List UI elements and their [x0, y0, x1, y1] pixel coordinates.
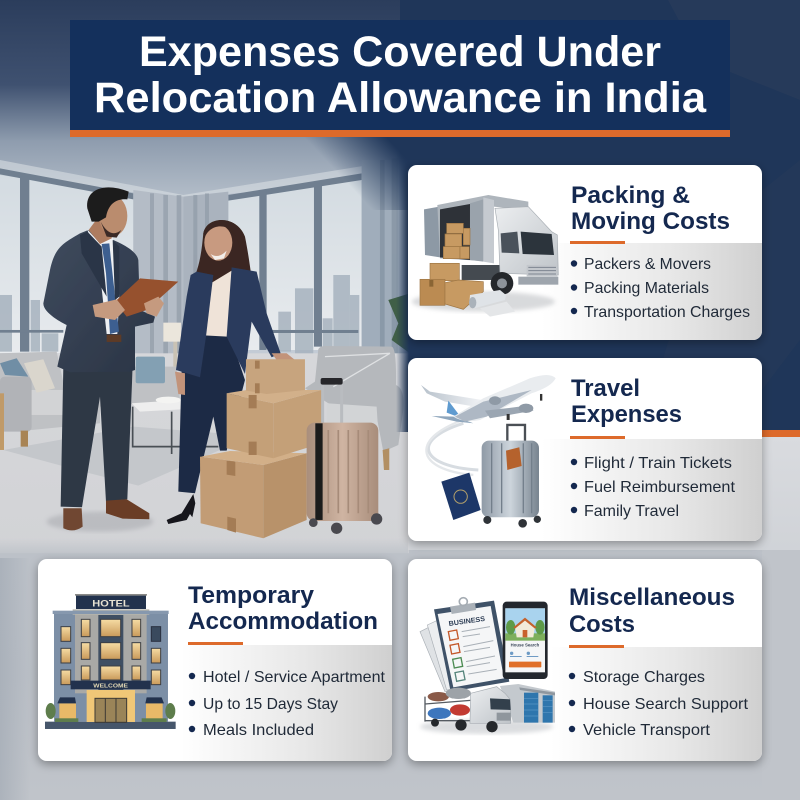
bullet list	[571, 256, 750, 321]
title text	[94, 28, 707, 122]
room interior	[0, 140, 411, 553]
bullet list: Vehicle Transport	[583, 722, 711, 739]
panel: travel expenses	[408, 358, 762, 541]
bullet list: House Search Support	[583, 696, 749, 713]
woman	[167, 220, 295, 524]
icon: moving truck with boxes	[412, 195, 558, 317]
bullet list: Storage Charges	[583, 669, 705, 686]
heading: Moving Costs	[571, 208, 730, 235]
bullet list	[569, 669, 749, 739]
panel: temporary accommodation	[38, 559, 392, 761]
bullet list: Flight / Train Tickets	[584, 455, 732, 472]
accent line	[569, 645, 624, 648]
photo edge blending	[0, 100, 420, 558]
heading	[188, 582, 378, 635]
bullet list: Up to 15 Days Stay	[203, 696, 338, 713]
title text: Relocation Allowance in India	[94, 74, 707, 122]
rose gold suitcase	[307, 378, 382, 534]
man	[43, 187, 178, 532]
accent line	[570, 436, 625, 439]
armchair	[305, 346, 404, 470]
heading	[569, 584, 735, 638]
title text: Expenses Covered Under	[139, 28, 661, 76]
icon: airplane with suitcase and passport	[421, 375, 556, 528]
heading: Expenses	[571, 401, 682, 428]
icon: hotel building: WELCOME	[93, 683, 128, 689]
bullet list	[189, 669, 386, 739]
bullet list: Transportation Charges	[584, 304, 750, 321]
heading	[571, 375, 682, 428]
bullet list: Meals Included	[203, 722, 314, 739]
bullet list: Packers & Movers	[584, 256, 711, 273]
heading: Accommodation	[188, 608, 378, 635]
coffee table	[132, 397, 218, 454]
heading: Miscellaneous	[569, 584, 735, 611]
title banner	[70, 20, 730, 137]
heading: Costs	[569, 611, 635, 638]
bullet list: Family Travel	[584, 503, 679, 520]
icon: clipboard, tablet, car carrier and storage unit: House Search	[511, 642, 540, 647]
stacked moving boxes	[200, 359, 322, 538]
heading: Packing &	[571, 182, 690, 209]
panel: miscellaneous costs	[408, 559, 762, 761]
heading: Temporary	[188, 582, 315, 609]
sofa	[0, 352, 180, 450]
bullet list: Fuel Reimbursement	[584, 479, 736, 496]
bullet list	[571, 455, 736, 520]
panel: packing and moving costs	[408, 165, 762, 340]
heading: Travel	[571, 375, 640, 402]
icon: hotel building	[45, 594, 176, 729]
accent line	[188, 642, 243, 645]
photo: room with two professionals and moving boxes	[0, 140, 411, 553]
bullet list: Hotel / Service Apartment	[203, 669, 386, 686]
icon: hotel building: HOTEL	[92, 598, 130, 608]
icon: clipboard, tablet, car carrier and storage unit	[420, 598, 555, 734]
heading	[571, 182, 730, 235]
bullet list: Packing Materials	[584, 280, 709, 297]
icon: clipboard, tablet, car carrier and storage unit: BUSINESS	[448, 616, 486, 628]
accent line	[570, 241, 625, 244]
